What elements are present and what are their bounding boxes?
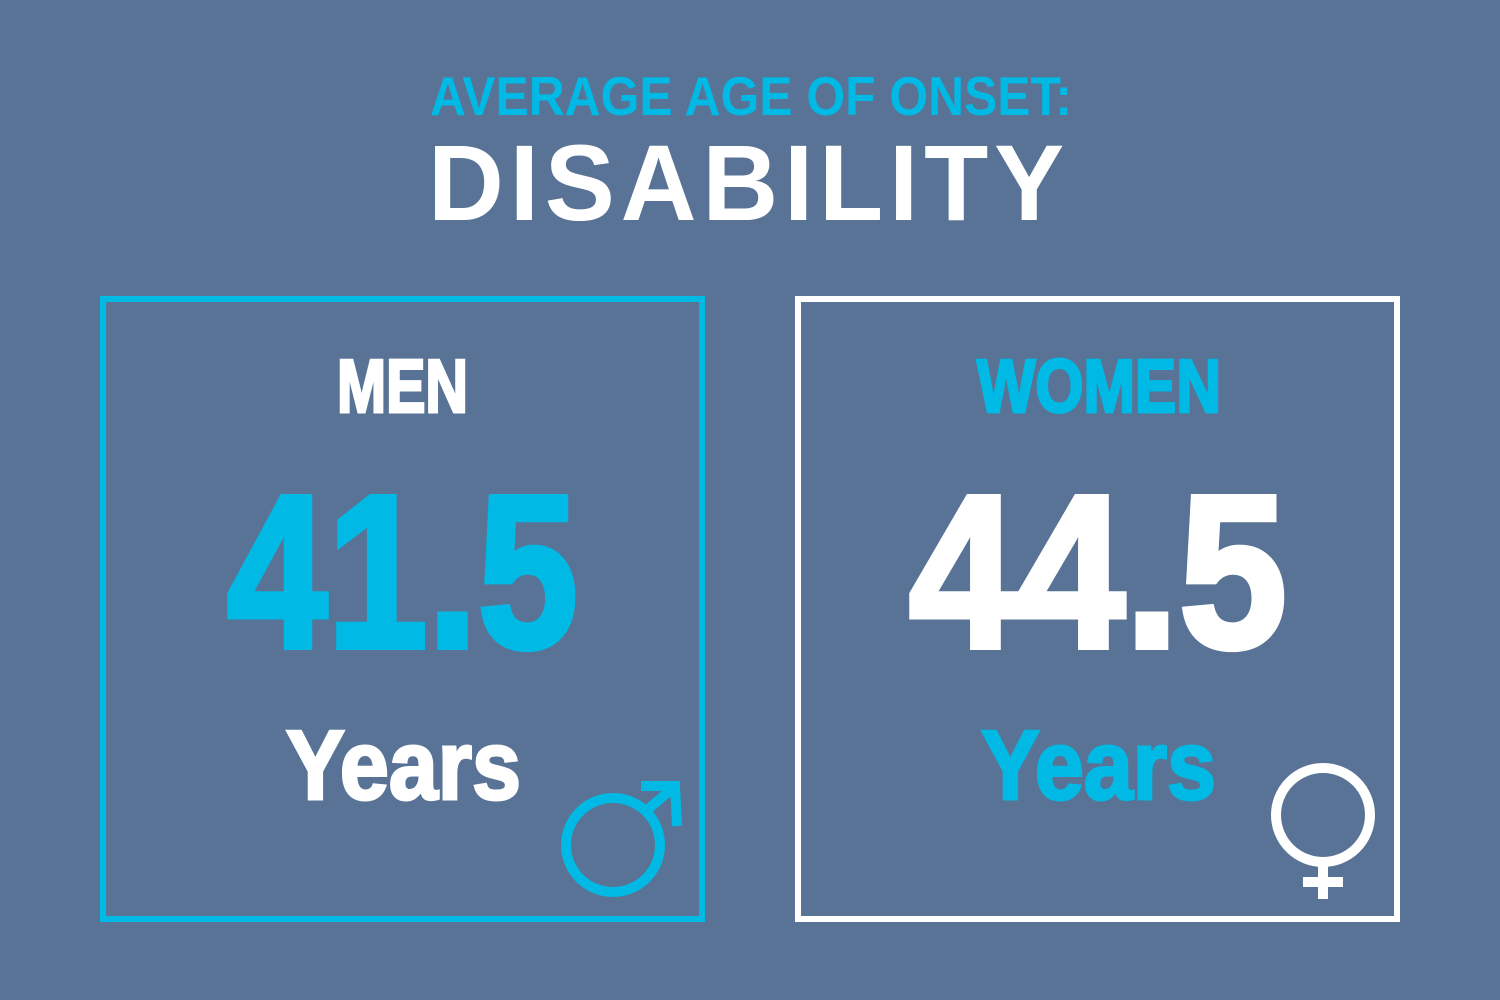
icon: female symbol — [1276, 768, 1370, 899]
title — [428, 65, 1072, 243]
panel: men — [103, 299, 702, 919]
heading: men: MEN — [337, 344, 468, 428]
heading: women: WOMEN — [977, 344, 1221, 428]
title: DISABILITY — [428, 122, 1070, 243]
number: 44.5: 44.5 — [909, 451, 1287, 694]
title: AVERAGE AGE OF ONSET: — [430, 65, 1072, 127]
label: years: Years — [981, 710, 1216, 820]
label: years: Years — [286, 710, 521, 820]
number: 41.5: 41.5 — [227, 451, 578, 694]
icon: male symbol — [566, 786, 677, 892]
panel: women — [798, 299, 1397, 919]
